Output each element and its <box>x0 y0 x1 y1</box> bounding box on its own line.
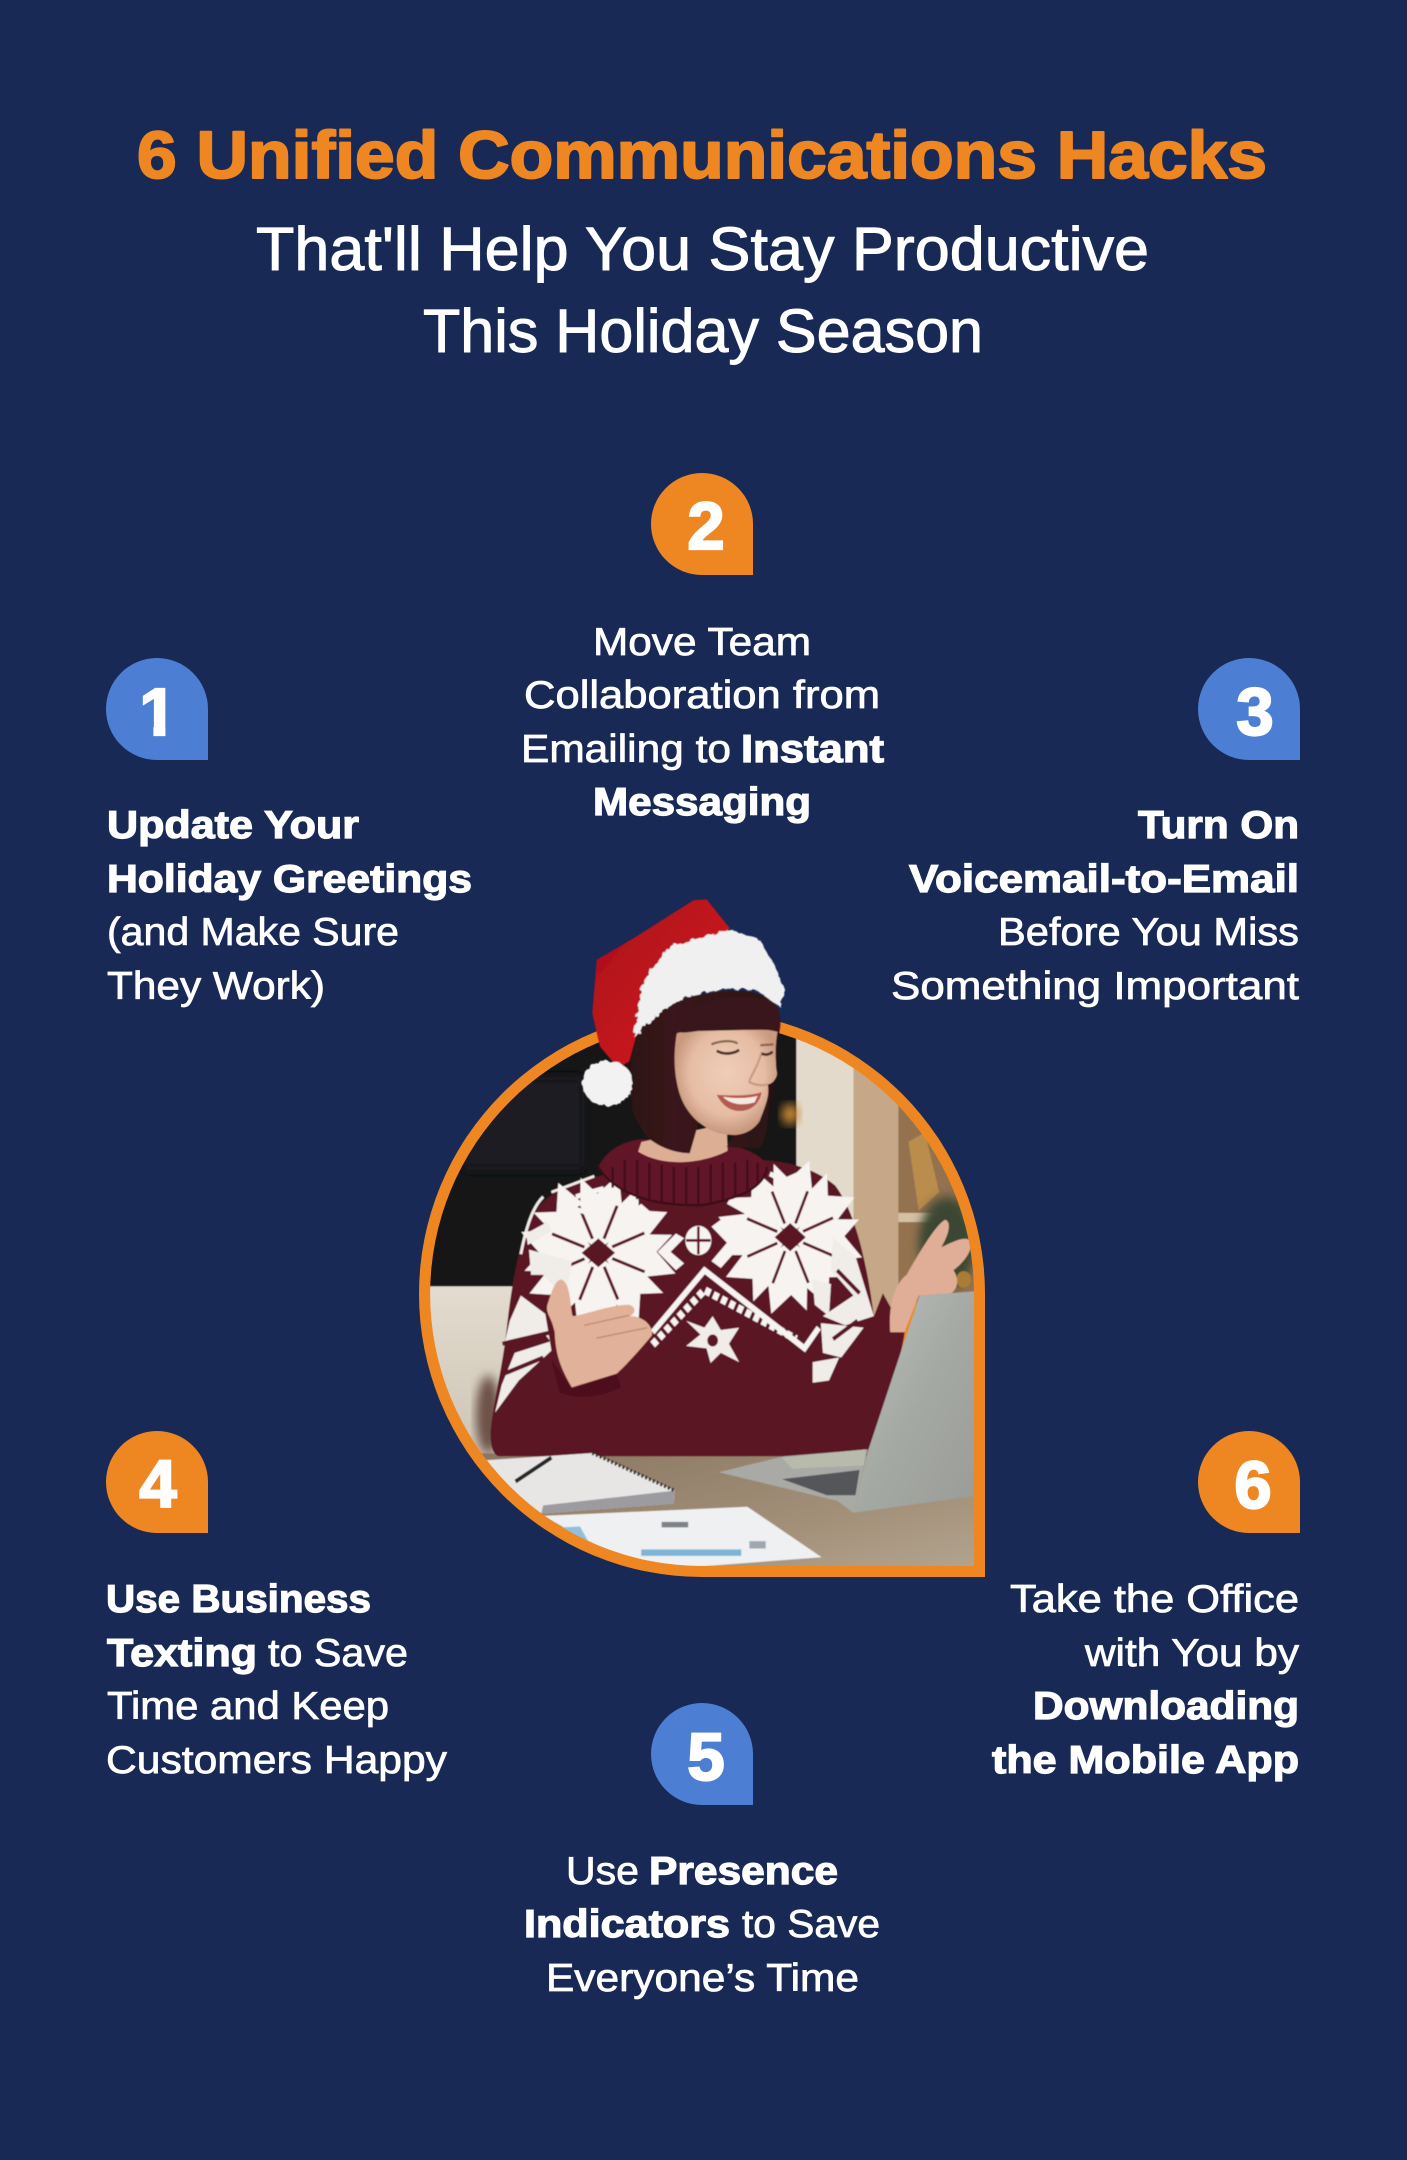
sweater <box>491 1155 904 1456</box>
text: hack 4: to Save <box>268 1632 408 1675</box>
badge 2 <box>651 473 753 575</box>
badge 2: 2 <box>687 489 725 564</box>
badge 1: 1 <box>139 675 177 750</box>
collar <box>598 1139 767 1205</box>
Santa hat fur trim <box>633 929 785 1037</box>
sweater: zigzag band <box>653 1270 819 1348</box>
desk <box>482 1452 974 1566</box>
text: hack 5: to Save <box>742 1903 880 1946</box>
text: hack 3: Voicemail-to-Email <box>909 858 1299 901</box>
text: hack 6: the Mobile App <box>992 1739 1299 1782</box>
fringe <box>662 997 780 1038</box>
sweater: sleeve patterns <box>495 1222 874 1413</box>
nose shadow <box>749 1052 768 1085</box>
text: hack 6 <box>992 1578 1300 1782</box>
text: hack 1: They Work) <box>107 965 325 1008</box>
text: hack 3 <box>891 804 1299 1008</box>
face <box>675 1029 778 1135</box>
title <box>137 118 1267 365</box>
subheading line 2: This Holiday Season <box>423 297 983 365</box>
text: hack 5: Use <box>566 1850 639 1893</box>
text: hack 2: Move Team <box>593 621 811 664</box>
badge 5 <box>651 1703 753 1805</box>
badge 4 <box>106 1431 208 1533</box>
right hand <box>890 1220 971 1332</box>
Santa hat pom-pom <box>582 1060 633 1106</box>
text: hack 4: Customers Happy <box>106 1739 448 1782</box>
left sleeve cuff <box>551 1360 621 1397</box>
badge 6: 6 <box>1234 1448 1272 1523</box>
badge 6 <box>1198 1431 1300 1533</box>
hair <box>627 990 780 1153</box>
text: hack 6: with You by <box>1084 1632 1300 1675</box>
panel: hack 3 <box>891 658 1300 1008</box>
heading: orange headline: 6 Unified Communications Hacks <box>137 118 1267 193</box>
text: hack 5: Indicators <box>524 1903 730 1946</box>
text: hack 4: Texting <box>107 1632 257 1675</box>
text: hack 1: Update Your <box>107 804 359 847</box>
panel: hack 5 <box>524 1703 880 2000</box>
panel: hack 1 <box>106 658 472 1008</box>
photo frame: orange teardrop <box>419 1011 985 1577</box>
left hand <box>547 1279 652 1387</box>
badge 4: 4 <box>139 1447 177 1522</box>
sweater: chevrons <box>576 1174 800 1213</box>
papers <box>543 1507 822 1571</box>
text: hack 2: Emailing to <box>521 728 731 771</box>
sweater: snowflake right <box>718 1161 862 1314</box>
room background <box>430 1033 974 1454</box>
text: hack 3: Before You Miss <box>998 911 1299 954</box>
photo: woman in Santa hat at laptop <box>404 899 985 1596</box>
text: hack 5 <box>524 1850 880 2000</box>
text: hack 5: Everyone’s Time <box>546 1957 859 2000</box>
photo scene clipped to teardrop <box>430 1033 974 1566</box>
neck <box>638 1123 728 1162</box>
text: hack 3: Turn On <box>1138 804 1299 847</box>
text: hack 4: Time and Keep <box>107 1685 389 1728</box>
text: hack 4 <box>106 1578 448 1782</box>
text: hack 2: Collaboration from <box>524 674 880 717</box>
laptop <box>719 1291 980 1513</box>
sweater: star <box>686 1316 739 1363</box>
sweater: centre motif <box>635 1197 749 1270</box>
badge 3 <box>1198 658 1300 760</box>
text: hack 1 <box>107 804 472 1008</box>
text: hack 2: Instant <box>741 728 884 771</box>
text: hack 6: Take the Office <box>1010 1578 1299 1621</box>
text: hack 6: Downloading <box>1033 1685 1299 1728</box>
text: hack 4: Use Business <box>106 1578 371 1621</box>
mouth <box>717 1092 762 1111</box>
badge 3: 3 <box>1236 675 1274 750</box>
subheading line 1: That'll Help You Stay Productive <box>256 215 1149 283</box>
text: hack 1: (and Make Sure <box>107 911 399 954</box>
woman's head and Santa hat <box>582 899 785 1162</box>
text: hack 2 <box>521 621 884 824</box>
eyes and brows <box>711 1041 773 1045</box>
sweater: snowflake left <box>520 1177 676 1318</box>
text: hack 3: Something Important <box>891 965 1299 1008</box>
panel: hack 4 <box>106 1431 448 1782</box>
badge 5: 5 <box>687 1720 725 1795</box>
notebook <box>478 1453 675 1514</box>
text: hack 2: Messaging <box>593 781 811 824</box>
text: hack 5: Presence <box>649 1850 838 1893</box>
panel: hack 6 <box>992 1431 1300 1782</box>
panel: hack 2 <box>521 473 884 824</box>
text: hack 1: Holiday Greetings <box>107 858 472 901</box>
Santa hat crown <box>592 899 730 1068</box>
badge 1 <box>106 658 208 760</box>
